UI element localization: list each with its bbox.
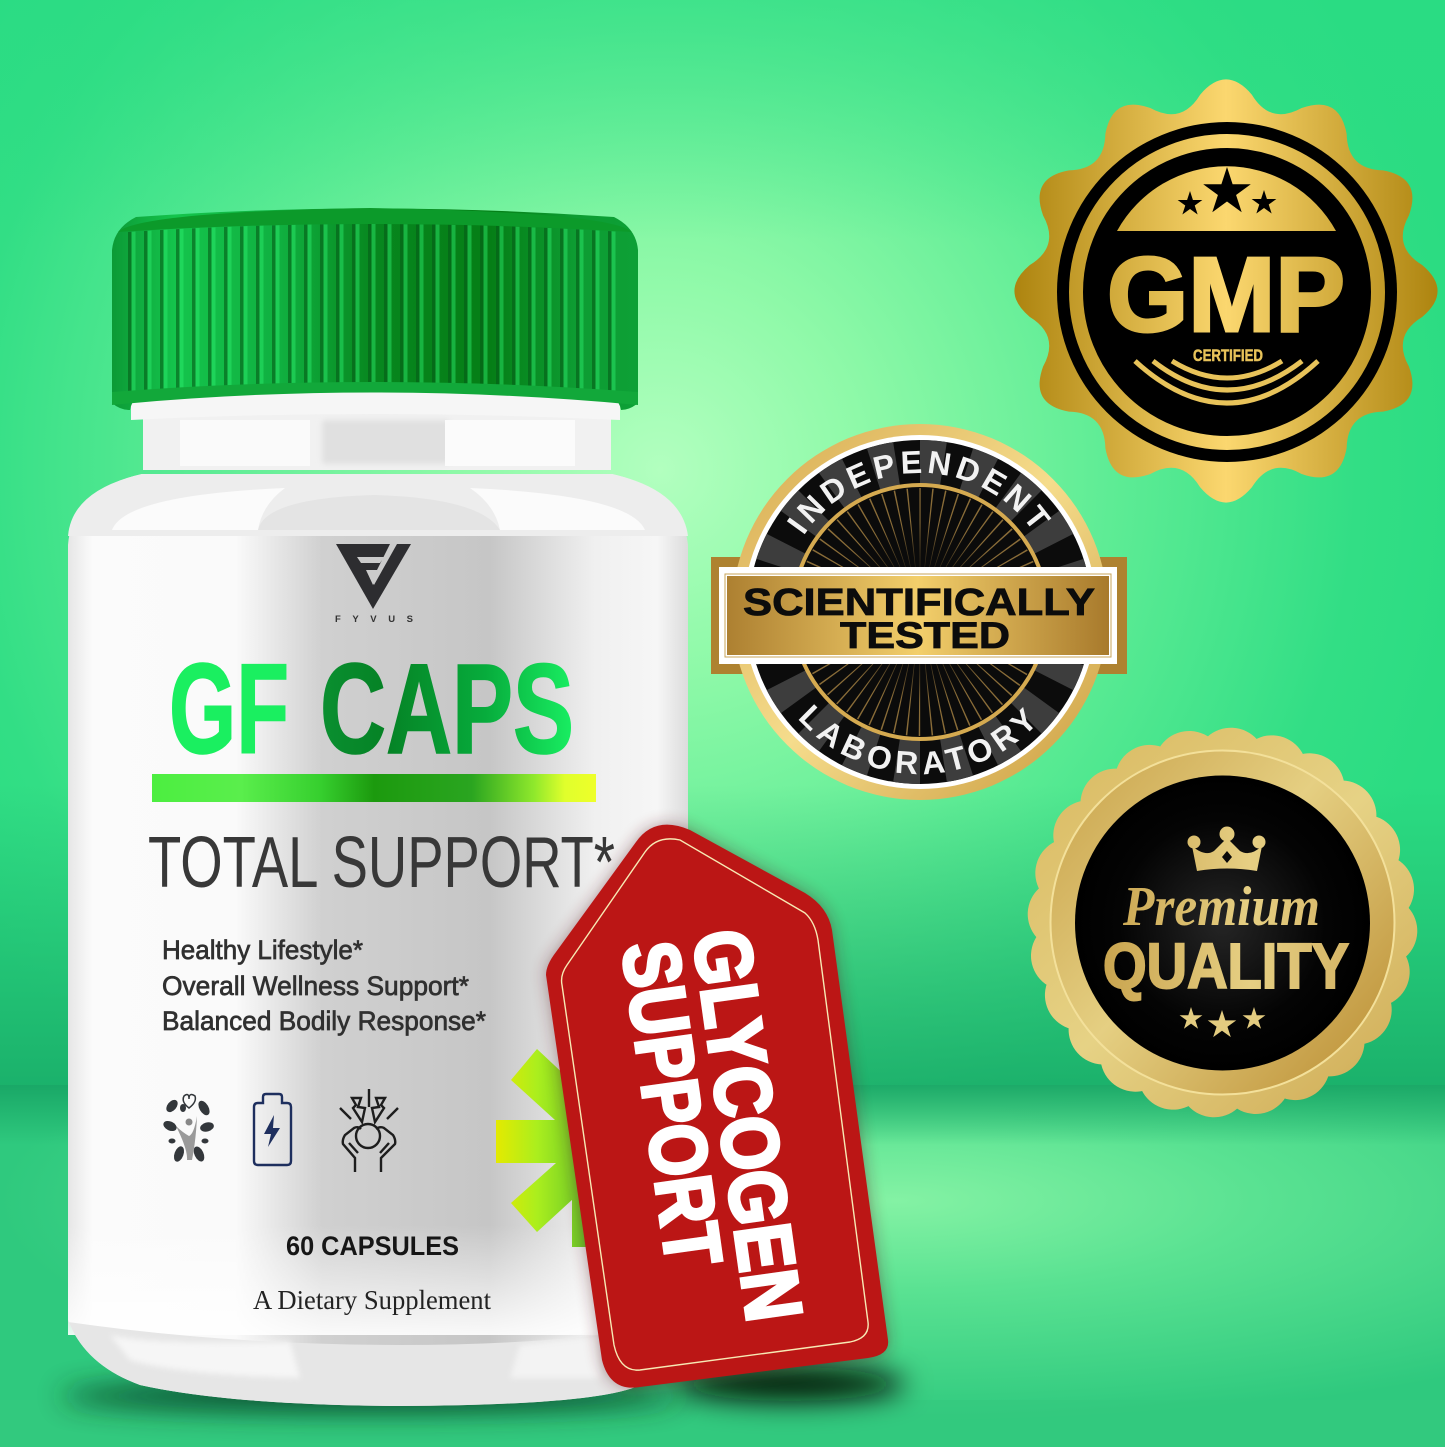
logo triangle — [336, 544, 411, 609]
white bottle lip — [131, 388, 620, 420]
green asterisk mark — [496, 1049, 634, 1247]
badge: GMP certified — [1014, 79, 1438, 503]
badge: scientifically tested — [711, 424, 1127, 800]
cap top edge — [118, 208, 632, 232]
cap body — [112, 208, 638, 410]
shoulder highlights — [112, 488, 645, 530]
curved text: independent: INDEPENDENT — [786, 450, 1052, 534]
curved lines — [1135, 361, 1318, 403]
base highlights — [110, 1335, 600, 1378]
gold dome — [1117, 166, 1336, 231]
gradient bar — [152, 774, 596, 802]
wavy gold seal — [1014, 79, 1438, 503]
crown — [1188, 826, 1266, 871]
bottle base — [68, 1320, 688, 1406]
cap ribs — [128, 224, 624, 396]
tag text: GLYCOGEN — [676, 924, 819, 1327]
tag body — [546, 825, 888, 1388]
lower fade on body — [68, 1225, 688, 1335]
banner: TESTED — [840, 615, 1010, 656]
icon: wellness tree — [162, 1095, 215, 1163]
stars — [1180, 1007, 1265, 1037]
tag stitched line — [562, 839, 868, 1370]
badge: premium quality — [1050, 750, 1394, 1094]
brand name: FYVUS — [335, 614, 413, 625]
floor shadow under bottle and tag — [60, 1367, 905, 1412]
GMP letters: GMP — [1107, 236, 1345, 354]
product name: CAPS — [320, 638, 574, 781]
capsule count: 60 CAPSULES — [286, 1231, 459, 1261]
stars — [1178, 167, 1276, 215]
brand logo — [335, 544, 413, 625]
banner — [719, 567, 1117, 664]
benefit list: Healthy Lifestyle* — [162, 935, 363, 965]
scalloped edge — [1054, 754, 1391, 1091]
red tag: glycogen support — [546, 825, 888, 1388]
grey spokes — [770, 462, 1070, 762]
bottle body — [68, 474, 688, 1406]
tag text: SUPPORT — [605, 936, 739, 1271]
inner gold ring — [1050, 750, 1394, 1094]
neck highlights — [180, 420, 575, 466]
subtitle: TOTAL SUPPORT* — [148, 823, 615, 903]
tag shadow — [546, 825, 888, 1388]
curved text: laboratory: LABORATORY — [798, 704, 1033, 774]
cap rim — [112, 382, 638, 405]
quality letters: QUALITY — [1103, 930, 1349, 1002]
icon: hands holding energy — [340, 1089, 398, 1172]
certified label: CERTIFIED — [1193, 346, 1263, 365]
benefit list: Balanced Bodily Response* — [162, 1006, 486, 1036]
product bottle — [68, 208, 688, 1406]
tag text — [605, 924, 819, 1327]
black disc — [1075, 776, 1370, 1070]
inner gold ring — [793, 485, 1047, 739]
body shoulder — [68, 474, 688, 536]
bottle neck — [143, 400, 611, 470]
bottle cap — [112, 208, 638, 410]
banner: SCIENTIFICALLY — [743, 582, 1095, 624]
gold outer circle — [732, 424, 1108, 800]
black ring — [748, 440, 1092, 784]
premium script: Premium — [1122, 876, 1320, 938]
product name: GF — [169, 638, 289, 781]
sunburst rays — [840, 532, 1000, 692]
icon: battery — [254, 1094, 291, 1165]
benefit list — [162, 935, 486, 1036]
dietary supplement line: A Dietary Supplement — [253, 1285, 491, 1315]
product name — [169, 638, 574, 781]
black rings — [1057, 122, 1397, 462]
side tabs — [711, 557, 1127, 674]
logo letter cut — [357, 544, 397, 585]
white ring — [743, 435, 1097, 789]
sunburst core — [830, 522, 1010, 702]
benefit list: Overall Wellness Support* — [162, 971, 469, 1001]
